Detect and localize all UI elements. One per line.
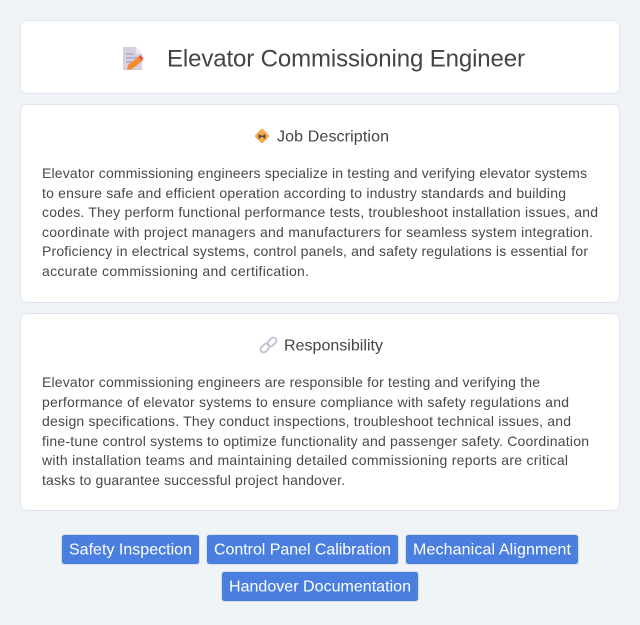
icon: chain link [259, 336, 278, 354]
text block: job description: Elevator commissioning engineers specialize in testing and verifying elevator systems [42, 165, 587, 181]
text block: responsibility: tasks to guarantee successful project handover. [42, 472, 345, 488]
text block: job description: codes. They perform functional performance tests, troubleshoot installation issues, and [42, 204, 598, 220]
text block: responsibility: with installation teams and maintaining detailed commissioning reports are critical [41, 452, 568, 468]
panel: job description [20, 104, 620, 302]
tag: handover documentation [222, 572, 418, 602]
tag: safety inspection [62, 534, 200, 564]
tag: safety inspection: Safety Inspection [69, 542, 192, 558]
text block: job description: to ensure safe and efficient operation according to industry standards and building [42, 185, 566, 201]
title text: Elevator Commissioning Engineer [167, 46, 525, 72]
text block: responsibility: Elevator commissioning engineers are responsible for testing and verifying the [42, 374, 540, 390]
icon: diamond sign [254, 128, 270, 144]
panel: responsibility [20, 314, 620, 510]
text block: job description: coordinate with project managers and manufacturers for seamless system integration. [42, 224, 593, 240]
tag: control panel calibration: Control Panel Calibration [214, 542, 391, 558]
heading: responsibility: Responsibility [284, 338, 383, 354]
panel: title [20, 20, 620, 94]
text block: job description: Proficiency in electrical systems, control panels, and safety regulations is essential for [42, 243, 588, 259]
icon: document with pencil [123, 47, 144, 70]
text block: job description: accurate commissioning and certification. [42, 263, 309, 279]
tags [62, 534, 578, 602]
heading: job description: Job Description [277, 128, 389, 146]
tag: control panel calibration [206, 534, 398, 564]
text block: responsibility: fine-tune control systems to optimize functionality and passenger safety. Coordination [42, 433, 589, 449]
tag: mechanical alignment [406, 534, 578, 564]
text block: responsibility: design specifications. They conduct inspections, troubleshoot technical issues, and [42, 413, 571, 429]
text block: responsibility [41, 374, 589, 488]
tag: handover documentation: Handover Documentation [229, 578, 411, 596]
tag: mechanical alignment: Mechanical Alignment [413, 542, 572, 558]
text block: job description [42, 165, 598, 279]
text block: responsibility: performance of elevator systems to ensure compliance with safety regulations and [42, 394, 569, 410]
